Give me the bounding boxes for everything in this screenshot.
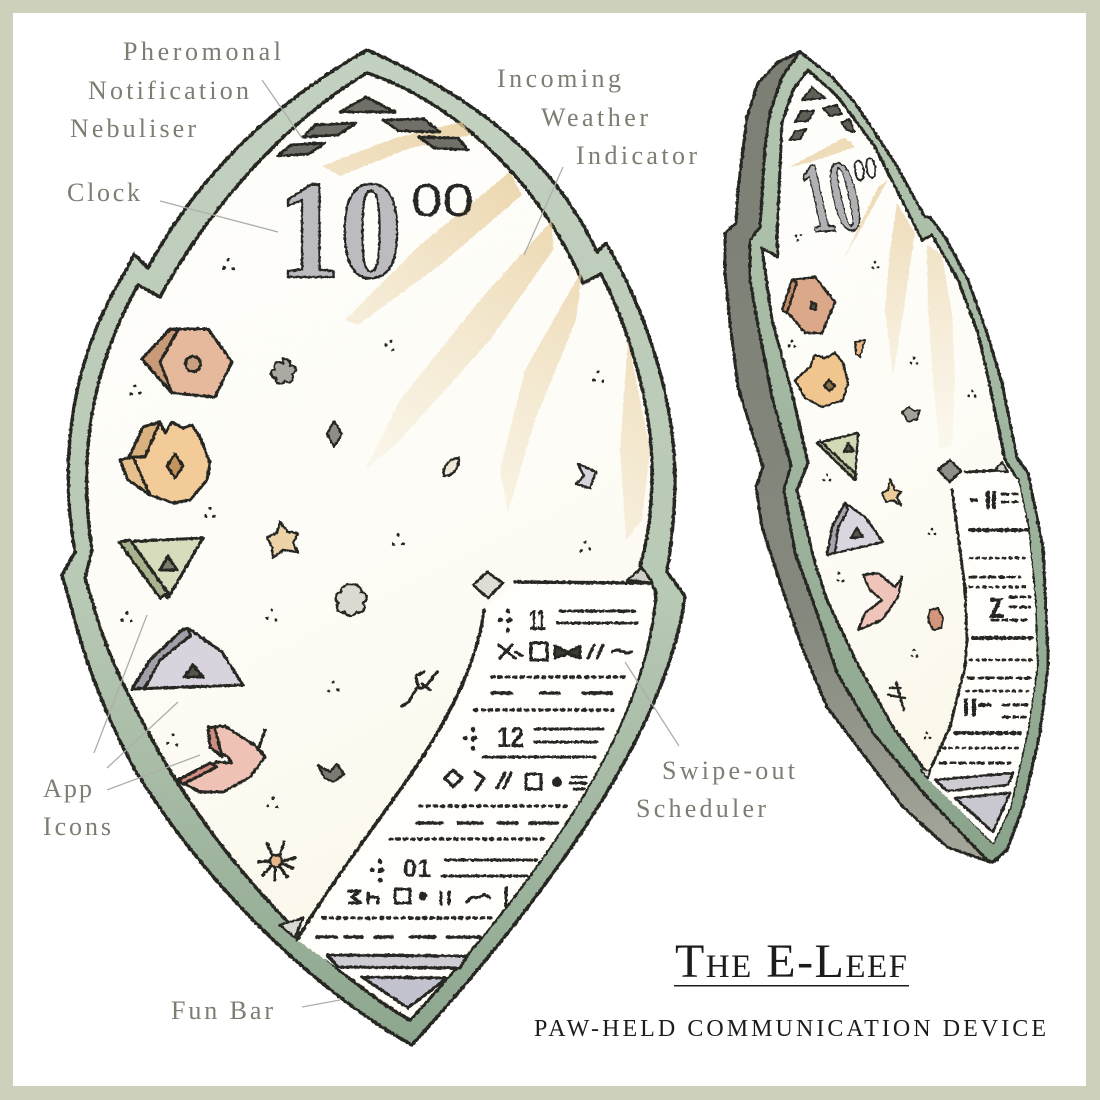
clock: 10 [278, 153, 402, 308]
moth [318, 764, 344, 782]
label: Incoming Weather Indicator: Incoming [497, 64, 621, 93]
leader lines [94, 80, 679, 1007]
label: App Icons [43, 774, 111, 841]
icon: butterfly app [858, 573, 902, 630]
scheduler icon rows [349, 643, 632, 906]
sun [258, 842, 295, 880]
flower [902, 407, 920, 422]
decorative doodles: dots [122, 260, 603, 807]
icon: triangle app [817, 433, 858, 480]
subtitle: PAW-HELD COMMUNICATION DEVICE [534, 1016, 1046, 1042]
icon: triangle app [119, 538, 203, 598]
curl [576, 464, 596, 488]
clock: 00 [851, 150, 879, 189]
fun bar [327, 955, 467, 1008]
star [882, 479, 901, 505]
label: Fun Bar: Fun Bar [171, 996, 273, 1025]
label: Pheromonal Notification Nebuliser: Nebuliser [70, 114, 196, 143]
main device: E-Leef front view [62, 50, 685, 1045]
swipe-out scheduler panel [280, 568, 654, 1018]
weather rays [790, 137, 955, 450]
doodles [789, 235, 975, 738]
scheduler hours [403, 605, 546, 883]
scheduler handle diamond [473, 572, 503, 598]
droplet [327, 421, 342, 447]
clock: 10 [791, 140, 871, 254]
label: Incoming Weather Indicator: Weather [541, 103, 648, 132]
icon: mountain app [132, 628, 243, 689]
blossom [336, 585, 367, 616]
leaf [855, 340, 865, 357]
app icons [782, 277, 902, 630]
label: Swipe-out Scheduler: Swipe-out [662, 756, 796, 785]
scheduler rows of glyph text [317, 611, 637, 937]
device rim [750, 52, 1048, 862]
device screen [85, 73, 656, 1020]
clock: 00 [411, 174, 474, 226]
icon: hexagon app [782, 277, 835, 333]
label: App Icons: Icons [43, 812, 111, 841]
blossom [928, 608, 943, 630]
fun bar button [362, 977, 447, 1008]
leaf [444, 458, 459, 476]
scheduler hours: 12 [497, 722, 524, 754]
title: THE E-LEEF [675, 935, 907, 988]
pheromonal notification nebuliser vents [277, 97, 468, 156]
scheduler hours: 01 [403, 855, 431, 883]
nebuliser vents [790, 87, 855, 140]
label: Swipe-out Scheduler [636, 756, 796, 823]
label: Clock: Clock [67, 178, 140, 207]
label: Pheromonal Notification Nebuliser: Notification [88, 76, 249, 105]
label: Pheromonal Notification Nebuliser: Pheromonal [123, 37, 281, 66]
icon: butterfly app [178, 726, 265, 792]
icon: mountain app [827, 503, 883, 555]
swipe-out scheduler [927, 460, 1037, 843]
glyph rows [940, 493, 1033, 763]
label: Pheromonal Notification Nebuliser [70, 37, 281, 143]
handle diamond [938, 460, 961, 482]
scheduler hours: 11 [529, 605, 546, 637]
decorative doodles: flowers and leaves [258, 359, 596, 880]
flower [271, 359, 296, 384]
weather rays [322, 122, 650, 540]
fun bar [920, 770, 1013, 832]
side device: E-Leef angled view [725, 52, 1048, 862]
small shapes [855, 340, 943, 710]
label: App Icons: App [43, 774, 92, 803]
star [267, 522, 298, 558]
device screen [762, 70, 1037, 843]
icon: round app [795, 353, 848, 407]
sprig [402, 672, 437, 706]
device rim [62, 50, 685, 1045]
label: Swipe-out Scheduler: Scheduler [636, 794, 766, 823]
device body extrusion [725, 52, 997, 862]
app icons [119, 329, 265, 792]
icon: round app [120, 422, 210, 503]
label: Incoming Weather Indicator [497, 64, 697, 170]
icon: hexagon app [142, 329, 232, 397]
sprig [888, 682, 905, 710]
label: Incoming Weather Indicator: Indicator [576, 141, 697, 170]
